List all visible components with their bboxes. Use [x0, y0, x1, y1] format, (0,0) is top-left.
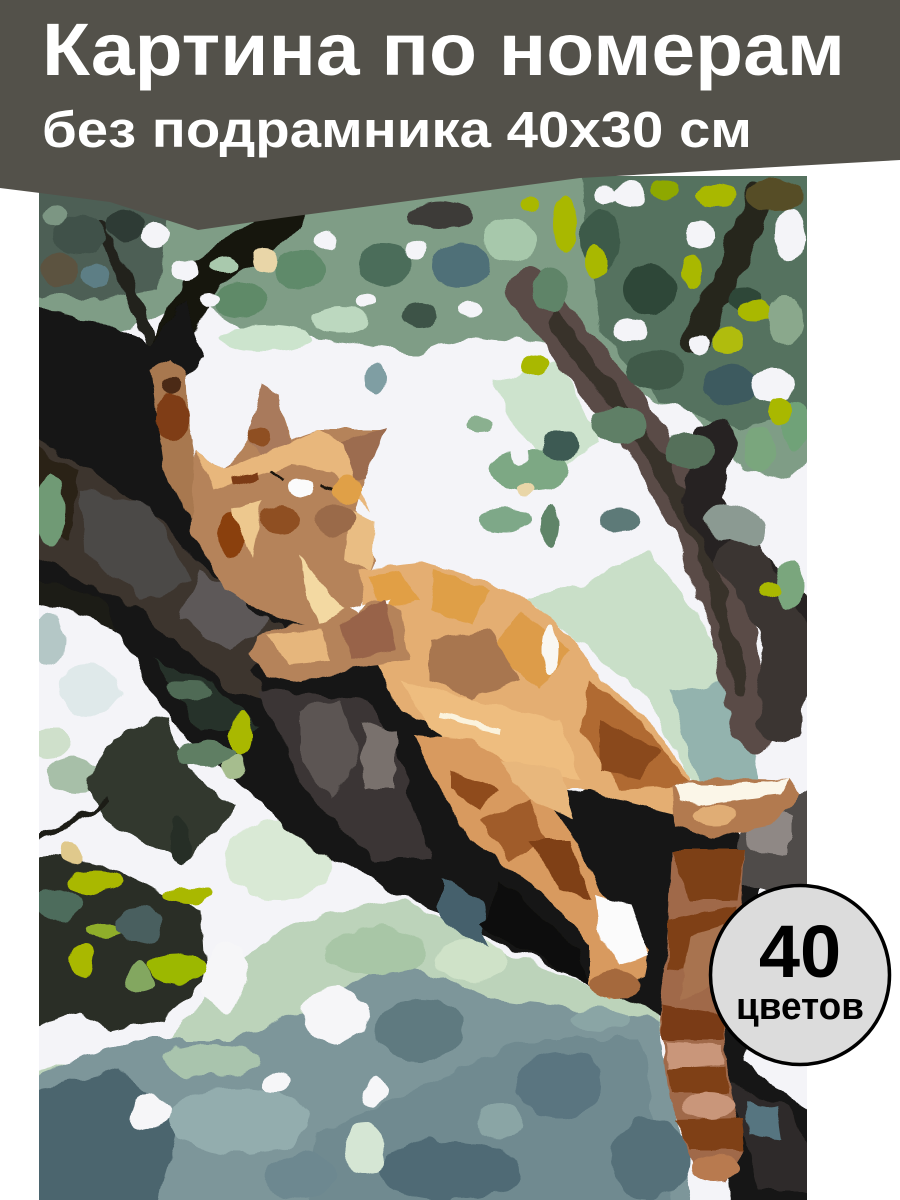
badge: 40 colours: цветов [736, 986, 864, 1028]
leaves in the canopy [42, 179, 809, 609]
cat rear foot [672, 778, 800, 838]
lower left leaf clusters [39, 716, 246, 1032]
cat head [190, 385, 385, 640]
painting: sleeping ginger cat on a tree branch [0, 170, 830, 1200]
cat body [350, 562, 690, 815]
upper and right tree branches [100, 195, 800, 730]
cat hind leg [415, 735, 650, 1000]
canopy base tone [0, 170, 830, 480]
badge: 40 colours: 40 [759, 910, 841, 993]
badge: 40 colours [710, 886, 890, 1064]
subtitle: без подрамника 40х30 см [42, 101, 752, 158]
ginger cat [150, 358, 800, 1182]
cat tail [660, 850, 745, 1182]
main tree trunk and branch [0, 300, 830, 1200]
pale green and blue-grey background foliage [0, 360, 765, 1200]
cat raised arm [150, 358, 215, 520]
cat front paw [250, 600, 410, 682]
title: Картина по номерам [42, 8, 845, 91]
sky background [39, 306, 807, 1200]
header banner [0, 0, 900, 230]
